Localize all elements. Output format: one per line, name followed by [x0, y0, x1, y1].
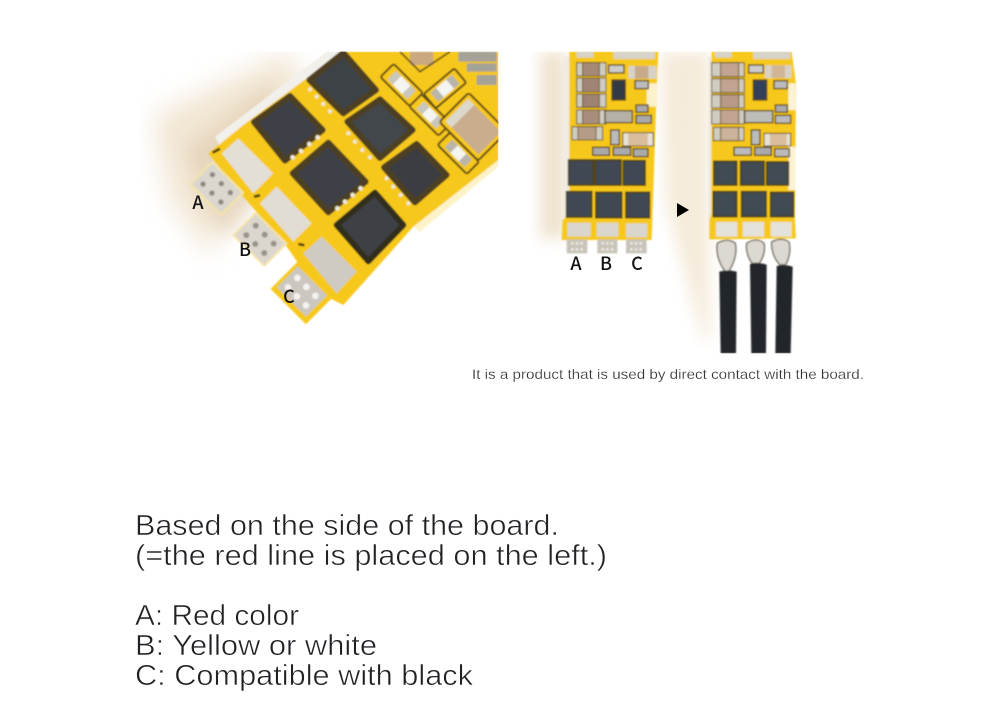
solder pad 3: [303, 237, 357, 293]
label: B on bare board: B: [600, 250, 612, 276]
solder joints: [717, 239, 790, 272]
label: B on close-up: B: [239, 236, 251, 262]
capacitor column right: [712, 63, 744, 141]
MOSFET chip 6: [337, 193, 403, 261]
photo: bare board and soldered board: [540, 52, 796, 353]
photo: angled close-up of board pads: [153, 52, 507, 324]
text block: wiring instructions: C: Compatible with black: [135, 660, 474, 692]
silver pads: [567, 223, 647, 237]
label: C on bare board: C: [631, 250, 643, 276]
tab A under-yellow and metal: [189, 161, 244, 216]
solder pad 1: [222, 138, 273, 193]
MOSFET chip 3: [347, 99, 413, 158]
tab B metal: [232, 212, 288, 267]
label: A on close-up: A: [192, 189, 204, 215]
right board: [709, 52, 796, 353]
MOSFET chip 1: [254, 96, 323, 161]
text block: wiring instructions: (=the red line is placed on the left.): [135, 540, 607, 572]
MOSFET chip 5: [293, 143, 366, 212]
label: A on bare board: A: [570, 250, 582, 276]
left board: [562, 52, 658, 253]
tab C yellow base and metal: [271, 261, 334, 324]
MOSFET rows: [567, 160, 649, 218]
MOSFET chip 4: [384, 144, 447, 202]
black wires: [719, 263, 793, 353]
silver pads right: [716, 222, 792, 237]
text block: wiring instructions: Based on the side of the board.: [135, 510, 559, 542]
caption: It is a product that is used by direct contact with the board.: [472, 366, 864, 382]
text block: wiring instructions: A: Red color: [135, 600, 299, 632]
contact tabs: [567, 239, 647, 253]
label: C on close-up: C: [283, 283, 295, 309]
text block: wiring instructions: [135, 510, 607, 692]
capacitor column: [572, 63, 606, 140]
text block: wiring instructions: B: Yellow or white: [135, 630, 377, 662]
solder pad 2: [260, 187, 312, 242]
MOSFET chip 2: [309, 53, 376, 113]
SMD resistors: [380, 52, 507, 174]
arrow: before to after: [677, 203, 689, 217]
MOSFET rows right: [713, 161, 793, 217]
